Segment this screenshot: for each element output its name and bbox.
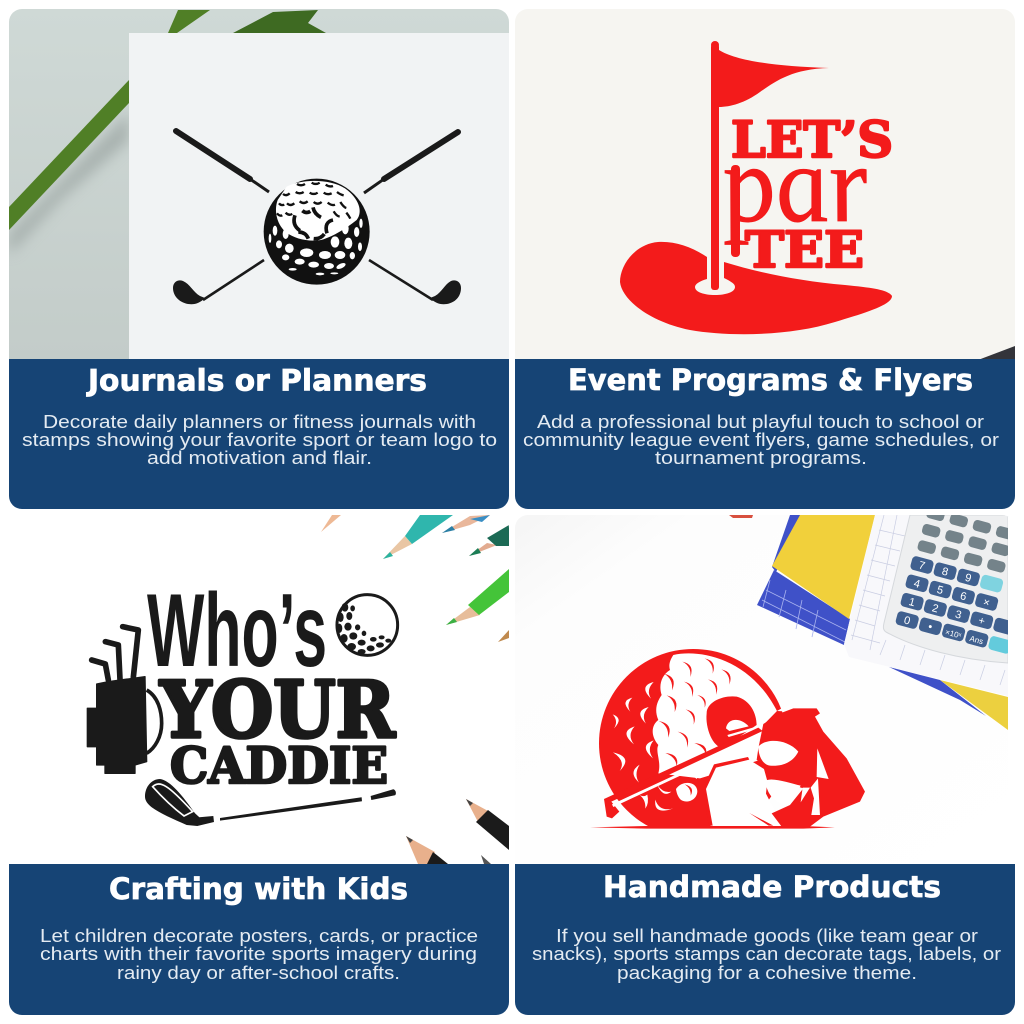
icon: golf club [145,779,396,826]
calculator keys [896,515,1008,654]
calculator keys: 1 [907,596,916,609]
stamp: golfer and golf ball [590,649,865,838]
description: snacks), sports stamps can decorate tags, labels, or [532,943,1001,964]
heading: Event Programs & Flyers [568,363,973,397]
lettering: YOUR [159,665,396,756]
description [22,414,496,464]
description: tournament programs. [655,447,867,468]
calculator keys: 6 [959,590,968,603]
description: Add a professional but playful touch to school or [537,411,984,432]
description: packaging for a cohesive theme. [617,962,917,983]
description: stamps showing your favorite sport or team logo to [22,429,497,450]
panel: journals or planners [9,9,509,509]
description: Decorate daily planners or fitness journals with [43,411,476,432]
calculator keys: 8 [940,566,949,579]
stamp lettering: TEE [745,220,864,279]
description [532,925,1001,983]
caption bar [515,359,1015,509]
calculator keys: 2 [931,602,940,615]
panel: event programs and flyers [515,9,1015,509]
calculator keys: + [977,615,986,628]
calculator keys: 9 [964,572,973,585]
description: If you sell handmade goods (like team gear or [556,925,978,946]
calculator keys: 3 [954,609,963,622]
description [40,925,478,983]
stamp: golf ball and crossed clubs [173,131,461,304]
lettering [147,590,398,785]
calculator keys: 4 [912,578,921,591]
lettering: CADDIE [170,736,388,795]
calculator keys: 7 [917,559,926,573]
caption bar [9,864,509,1015]
heading: Handmade Products [603,870,941,904]
stamp: who's your caddie [87,573,398,826]
caption bar [9,359,509,509]
calculator keys: × [982,596,991,610]
caption bar [515,864,1015,1015]
description: community league event flyers, game schedules, or [523,429,999,450]
heading: Journals or Planners [86,364,427,398]
description: add motivation and flair. [147,447,372,468]
description: rainy day or after-school crafts. [117,962,400,983]
description: Let children decorate posters, cards, or practice [40,925,478,946]
calculator keys: • [927,621,934,634]
lettering: Who’s [147,573,327,689]
icon: golf bag with clubs [87,627,162,773]
panel: crafting with kids [9,515,509,1015]
calculator keys: Ans [969,634,984,646]
photo: off-white paper [515,9,1015,360]
icon: golf ball [336,595,398,655]
photo: notebooks and calculator on white desk [515,515,1008,730]
stamp lettering: par [703,123,880,245]
calculator keys: 0 [902,614,911,628]
photo: white background with coloured pencils [321,515,509,864]
panel: handmade products [515,506,1024,1015]
description: charts with their favorite sports imagery during [40,943,477,964]
description [523,411,999,468]
stamp: let's par tee flag [620,41,893,334]
stamp lettering: LET’S [731,110,893,169]
calculator keys: ×10ˣ [944,627,963,640]
heading: Crafting with Kids [109,872,408,906]
photo: paper on grey background with green stem [9,9,509,360]
calculator keys: 5 [935,584,945,597]
